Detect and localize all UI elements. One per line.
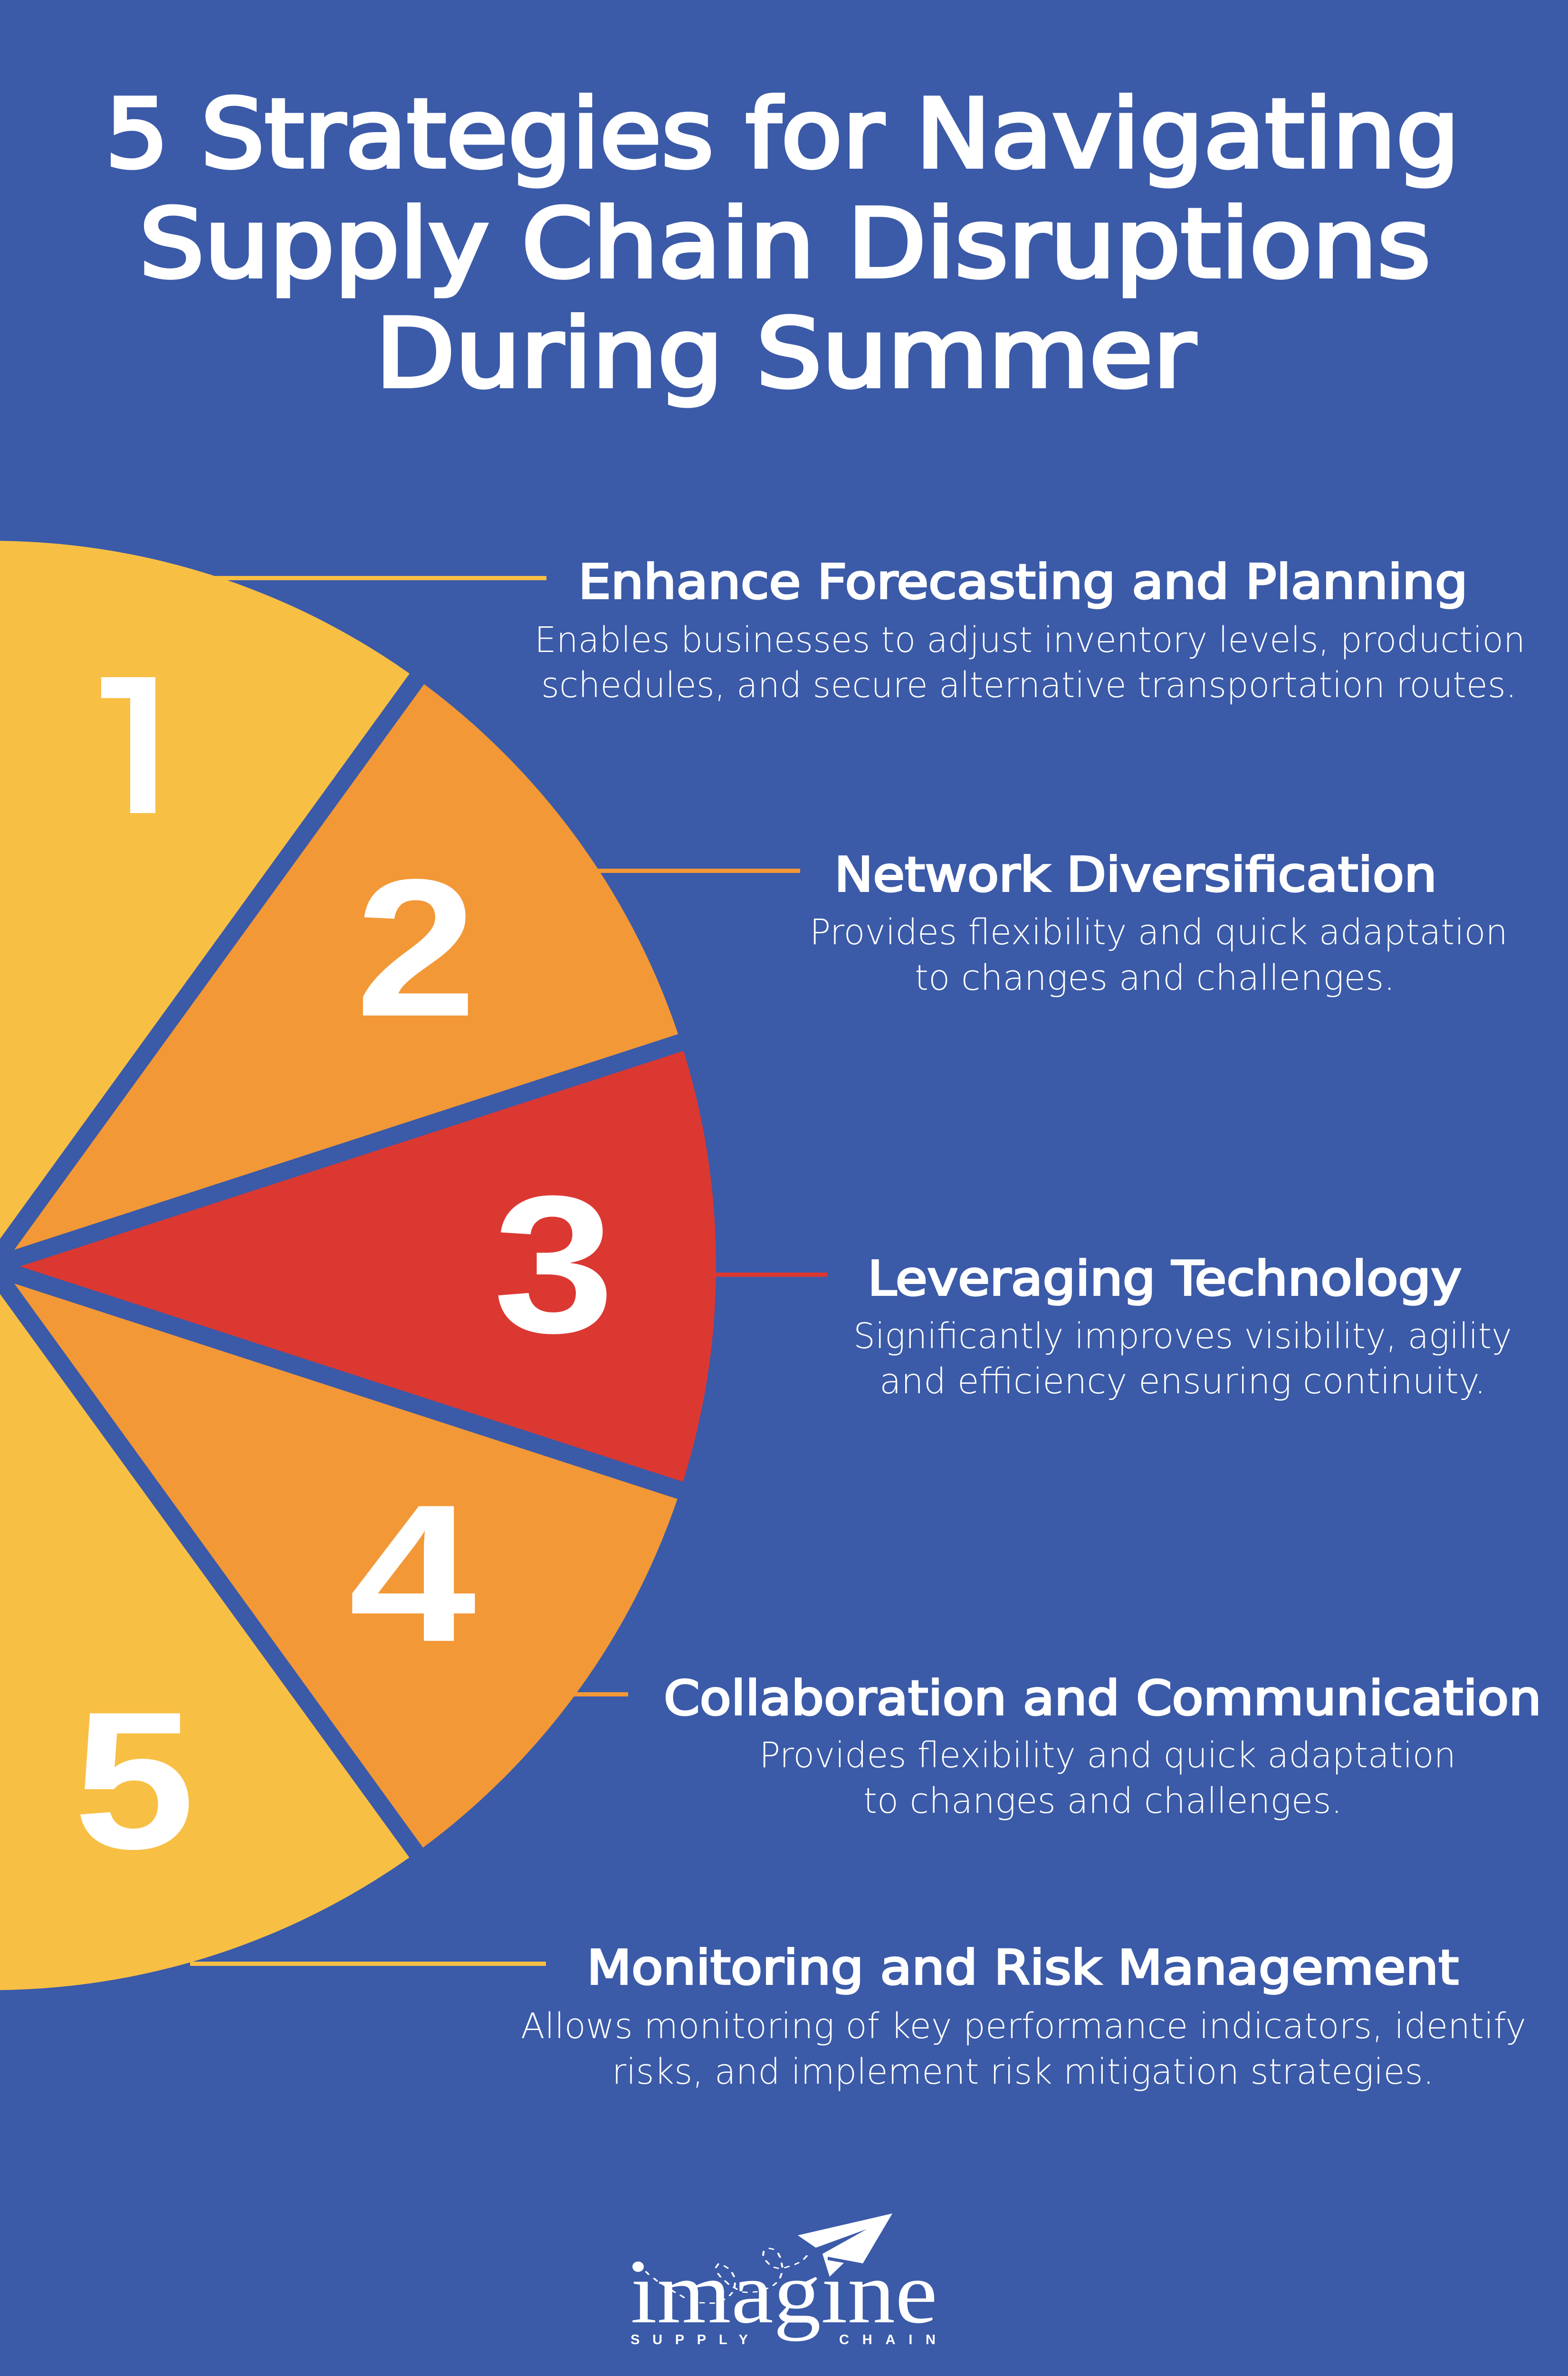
wedge 1: yellow	[0, 541, 410, 1239]
wedge 5: yellow	[0, 1294, 410, 1990]
logo i dot	[632, 2261, 644, 2272]
description 4: Provides flexibility and quick adaptation	[759, 1735, 1456, 1776]
number 1	[101, 677, 155, 813]
number 3: 3	[493, 1155, 614, 1374]
title: Supply Chain Disruptions	[139, 189, 1431, 299]
heading 1: Enhance Forecasting and Planning	[578, 554, 1468, 610]
strategy 3	[713, 1251, 1512, 1402]
description 2	[810, 912, 1508, 998]
heading 4: Collaboration and Communication	[664, 1670, 1541, 1726]
description 5	[521, 2006, 1526, 2092]
heading 2: Network Diversification	[834, 847, 1437, 902]
strategy 5	[190, 1940, 1526, 2092]
description 3	[853, 1316, 1512, 1402]
description 1	[535, 620, 1525, 706]
wedge 4: orange	[14, 1284, 678, 1848]
description 1: schedules, and secure alternative transportation routes.	[541, 665, 1517, 706]
strategy 4	[568, 1670, 1541, 1821]
connector line 2	[596, 869, 800, 873]
description 1: Enables businesses to adjust inventory levels, production	[535, 620, 1525, 661]
wedge 3: red	[20, 1051, 716, 1482]
dashed flight path	[646, 2248, 807, 2303]
description 5: risks, and implement risk mitigation strategies.	[612, 2051, 1434, 2092]
logo tagline: chain: CHAIN	[839, 2332, 936, 2347]
title	[105, 79, 1460, 409]
description 4	[759, 1735, 1456, 1821]
connector line 5	[190, 1962, 546, 1966]
description 2: Provides flexibility and quick adaptation	[810, 912, 1508, 953]
connector line 1	[214, 576, 546, 580]
pie chart: five strategy wedges	[0, 541, 716, 1990]
description 3: Significantly improves visibility, agility	[853, 1316, 1512, 1357]
strategy 2	[596, 847, 1508, 998]
description 3: and efficiency ensuring continuity.	[880, 1361, 1486, 1402]
icon: paper plane	[798, 2213, 892, 2277]
number 2: 2	[355, 839, 477, 1057]
logo tagline: supply: SUPPLY	[631, 2332, 748, 2347]
title: 5 Strategies for Navigating	[105, 79, 1460, 190]
connector line 3	[713, 1273, 827, 1277]
number 5: 5	[74, 1671, 195, 1890]
number 4: 4	[349, 1464, 478, 1683]
logo wordmark: ımagıne	[631, 2244, 937, 2342]
description 4: to changes and challenges.	[863, 1781, 1342, 1821]
description 5: Allows monitoring of key performance indicators, identify	[521, 2006, 1526, 2047]
logo: Imagine Supply Chain	[631, 2213, 937, 2347]
title: During Summer	[375, 298, 1196, 409]
heading 5: Monitoring and Risk Management	[587, 1940, 1459, 1995]
description 2: to changes and challenges.	[915, 958, 1395, 998]
strategy 1	[214, 554, 1525, 706]
wedge 2: orange	[14, 684, 679, 1250]
number 1: 1	[84, 636, 192, 855]
connector line 4	[568, 1692, 628, 1696]
heading 3: Leveraging Technology	[868, 1251, 1462, 1306]
